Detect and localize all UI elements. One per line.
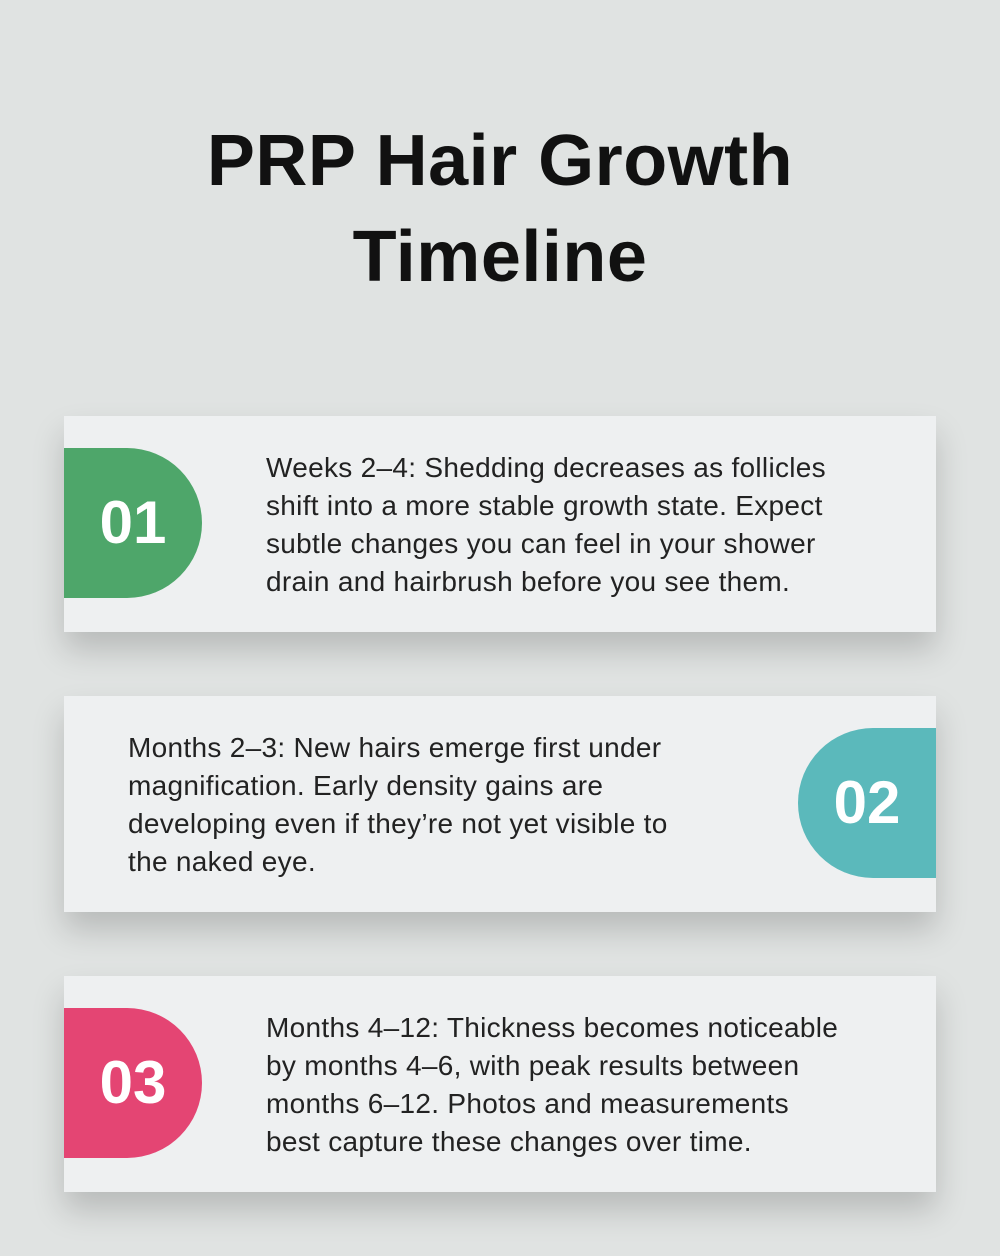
text 02: [128, 732, 668, 877]
text 03: best capture these changes over time.: [266, 1126, 752, 1157]
badge 01: [64, 448, 202, 598]
text 02: developing even if they’re not yet visible to: [128, 808, 668, 839]
badge 01: 01: [100, 489, 166, 556]
panel: step 02: [64, 696, 936, 912]
panel: step 01: [64, 416, 936, 632]
badge 03: 03: [100, 1049, 166, 1116]
badge 02: [798, 728, 936, 878]
text 02: Months 2–3: New hairs emerge first under: [128, 732, 661, 763]
title: [207, 121, 793, 297]
text 03: by months 4–6, with peak results between: [266, 1050, 799, 1081]
text 02: the naked eye.: [128, 846, 316, 877]
text 01: [266, 452, 826, 597]
text 03: [266, 1012, 838, 1157]
text 01: Weeks 2–4: Shedding decreases as follicles: [266, 452, 826, 483]
panel: step 03: [64, 976, 936, 1192]
text 03: Months 4–12: Thickness becomes noticeable: [266, 1012, 838, 1043]
badge 02: 02: [834, 769, 900, 836]
title: PRP Hair Growth: [207, 121, 793, 201]
text 03: months 6–12. Photos and measurements: [266, 1088, 789, 1119]
title: Timeline: [353, 217, 647, 297]
text 01: subtle changes you can feel in your shower: [266, 528, 816, 559]
text 01: shift into a more stable growth state. Expect: [266, 490, 823, 521]
text 01: drain and hairbrush before you see them.: [266, 566, 790, 597]
badge 03: [64, 1008, 202, 1158]
text 02: magnification. Early density gains are: [128, 770, 603, 801]
